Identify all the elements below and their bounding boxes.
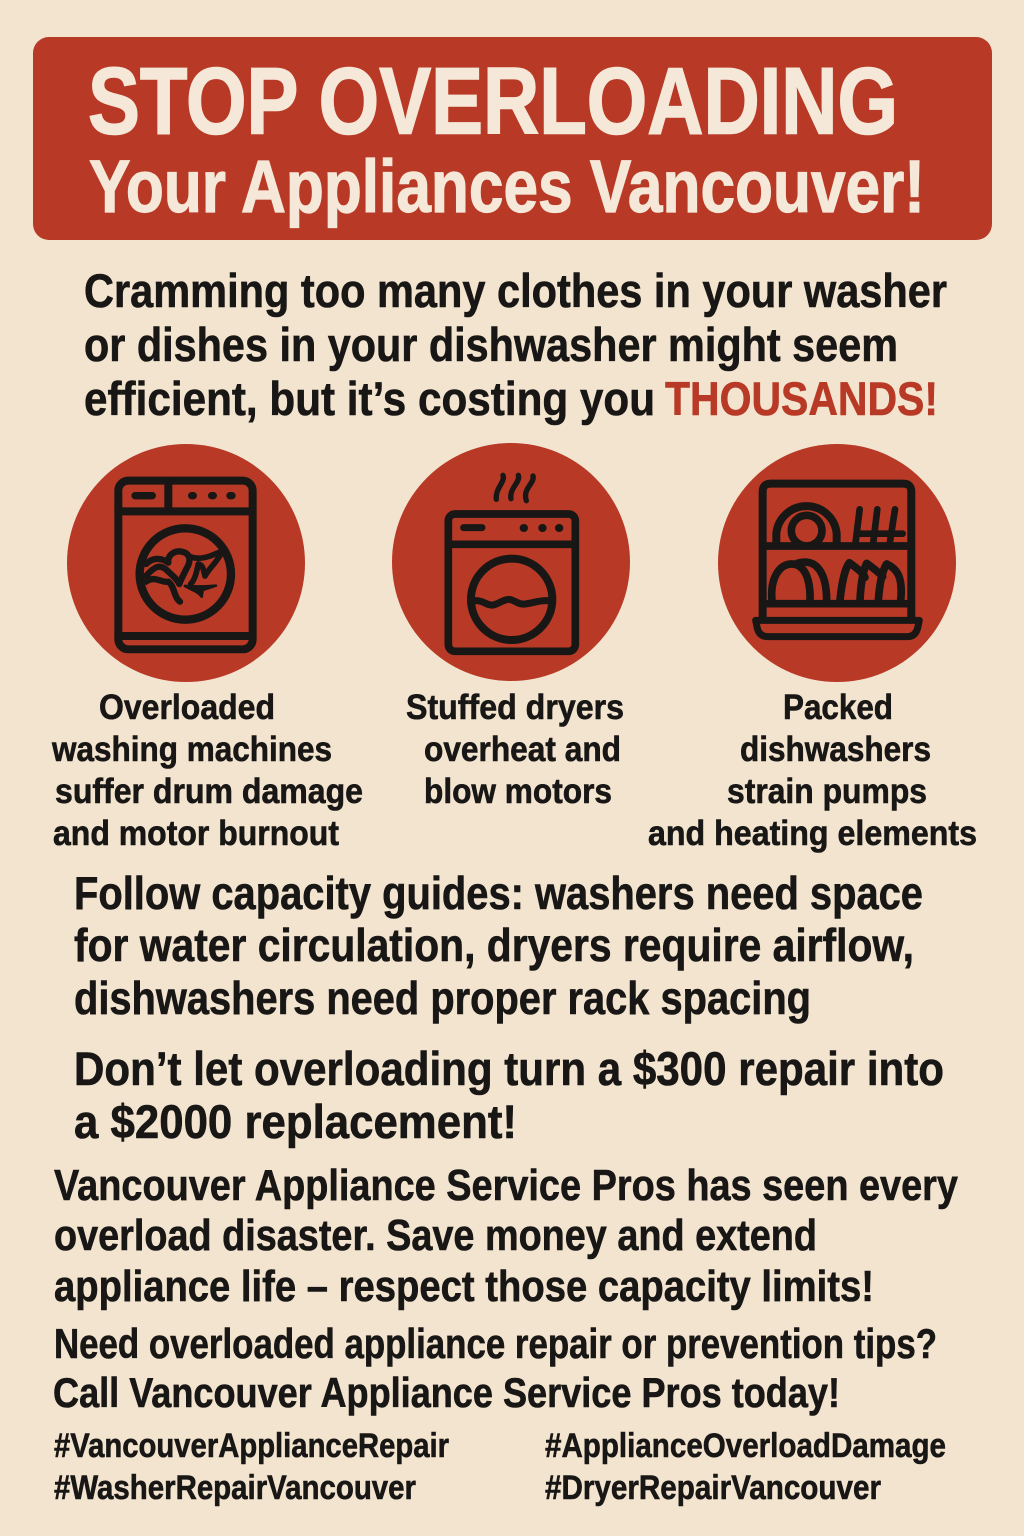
hashtags: #WasherRepairVancouver	[54, 1469, 416, 1507]
company message: appliance life – respect those capacity limits!	[54, 1262, 874, 1311]
capacity guide text	[74, 867, 923, 1024]
caption: dryers	[406, 688, 624, 811]
icon: overheating dryer	[392, 443, 630, 681]
repair cost warning: a $2000 replacement!	[74, 1095, 517, 1148]
call to action	[53, 1320, 937, 1416]
repair cost warning	[74, 1042, 944, 1148]
intro text	[84, 264, 947, 425]
caption: dishwashers: strain pumps	[727, 772, 927, 811]
caption: washing machines: and motor burnout	[53, 814, 339, 853]
caption: dishwashers: and heating elements	[648, 814, 977, 853]
caption: dishwashers	[648, 688, 977, 853]
icon: overloaded washer with damaged drum	[67, 444, 305, 682]
caption: washing machines: Overloaded	[99, 688, 275, 727]
capacity guide text: for water circulation, dryers require airflow,	[74, 919, 914, 971]
caption: dryers: blow motors	[424, 772, 612, 811]
intro text: efficient, but it’s costing you	[84, 372, 655, 425]
caption: dishwashers: dishwashers	[740, 730, 931, 769]
hashtags: #DryerRepairVancouver	[545, 1469, 881, 1507]
hashtags: #ApplianceOverloadDamage	[545, 1427, 946, 1465]
title banner	[33, 37, 992, 240]
repair cost warning: Don’t let overloading turn a $300 repair into	[74, 1042, 944, 1095]
capacity guide text: Follow capacity guides: washers need space	[74, 867, 923, 919]
intro text: THOUSANDS!	[665, 372, 938, 425]
caption: washing machines: suffer drum damage	[55, 772, 363, 811]
icon: packed dishwasher	[718, 444, 956, 682]
company message: overload disaster. Save money and extend	[54, 1211, 817, 1260]
caption: dryers: overheat and	[424, 730, 621, 769]
company message	[54, 1161, 958, 1311]
hashtags	[54, 1427, 946, 1507]
call to action: Call Vancouver Appliance Service Pros today!	[53, 1369, 840, 1416]
intro text: or dishes in your dishwasher might seem	[84, 318, 898, 371]
capacity guide text: dishwashers need proper rack spacing	[74, 972, 811, 1024]
hashtags: #VancouverApplianceRepair	[54, 1427, 449, 1465]
caption: washing machines	[51, 688, 363, 853]
caption: washing machines: washing machines	[51, 730, 332, 769]
caption: dishwashers: Packed	[783, 688, 893, 727]
caption: dryers: Stuffed dryers	[406, 688, 624, 727]
